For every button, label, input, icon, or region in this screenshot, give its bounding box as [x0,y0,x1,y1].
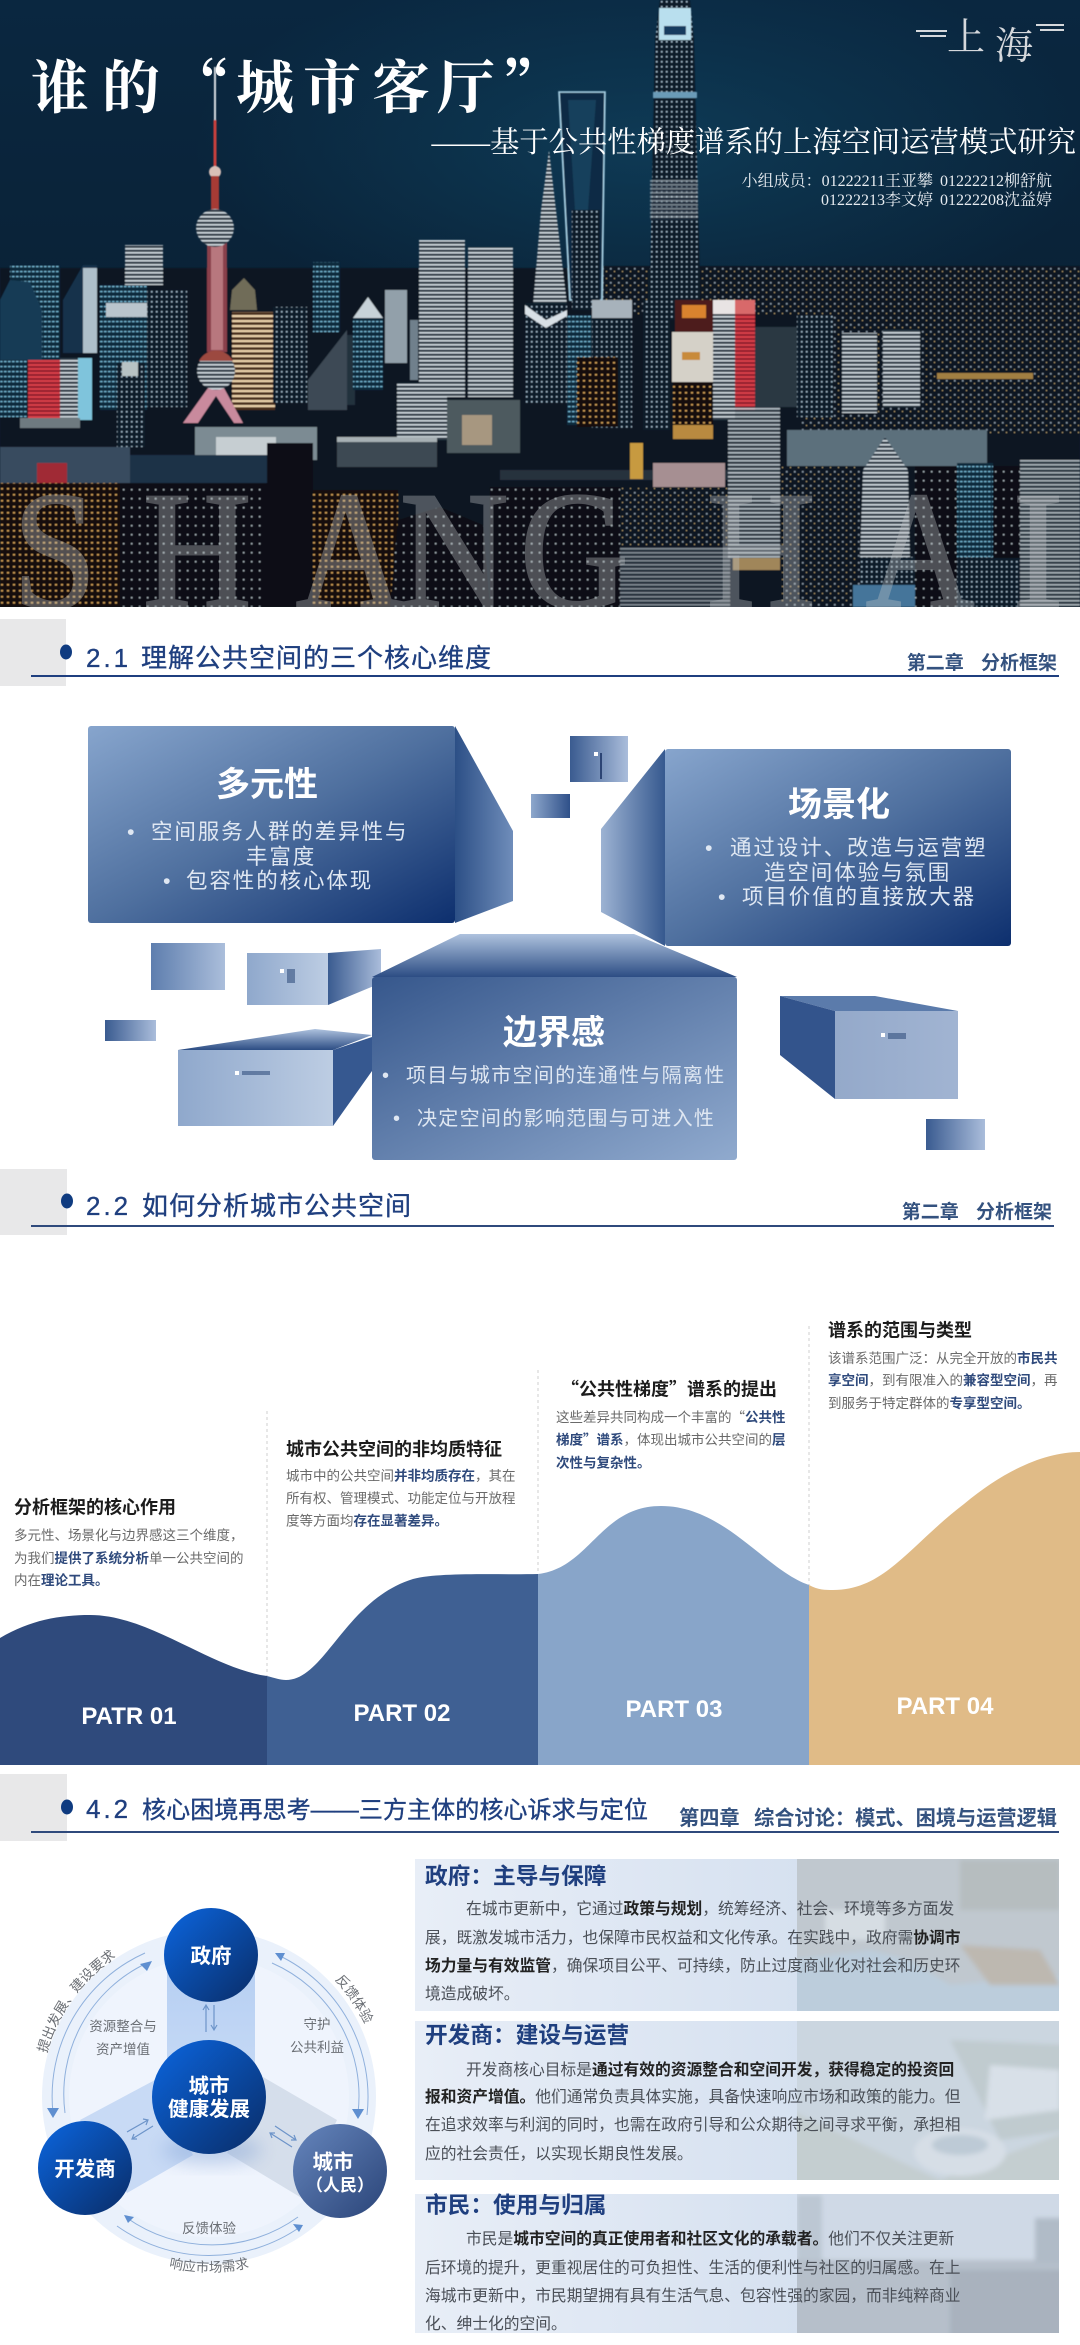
labels: 响应市场需求 [170,2257,249,2273]
node: 城市健康发展: 城市 [188,2074,230,2098]
panel: 市民: 市民是城市空间的真正使用者和社区文化的承载者。他们不仅关注更新 [466,2229,954,2248]
header 4.2 [0,1774,1059,1841]
Shanghai skyline illustration [0,0,1080,607]
panel: 市民: 海城市更新中，市民期望拥有具有生活气息、包容性强的家园，而非纯粹商业 [425,2287,960,2305]
header 4.2: 核心困境再思考——三方主体的核心诉求与定位 [142,1797,648,1824]
card: 多元性: • [127,820,136,844]
card: 场景化 [601,749,1011,946]
text: part 01 [14,1496,244,1588]
labels: 公共利益 [290,2040,344,2055]
labels: 反馈体验 [335,1974,374,2024]
text: part 01: 为我们提供了系统分析单一公共空间的 [14,1550,244,1566]
small double arrows [127,2005,296,2147]
card: 场景化: 项目价值的直接放大器 [742,885,976,909]
card: 边界感: • [393,1108,401,1130]
panel: 政府: 政府：主导与保障 [425,1863,606,1889]
card: 多元性 [88,726,513,923]
text: part 03 [556,1376,786,1470]
panel: 开发商 [415,2021,1059,2180]
panel: 政府: 场力量与有效监管，确保项目公平、可持续，防止过度商业化对社会和历史环 [425,1956,960,1975]
card: 场景化: • [705,836,714,860]
card: 场景化: 通过设计、改造与运营塑 [730,836,987,860]
panel: section 2.2 analysis waves [0,1169,1080,1765]
text: part 02: 度等方面均存在显著差异。 [286,1512,448,1528]
node: 城市（人民）: （人民） [306,2171,374,2196]
text: part 01: 多元性、场景化与边界感这三个维度， [14,1527,244,1543]
wave: part 04 [809,1452,1080,1765]
logo: 上海: 海 [995,26,1033,68]
wave: part 01: PATR 01 [81,1703,177,1730]
arrow heads [47,1953,364,2232]
panel: 开发商: 开发商核心目标是通过有效的资源整合和空间开发，获得稳定的投资回 [466,2060,954,2079]
header 4.2: 第四章 综合讨论：模式、困境与运营逻辑 [679,1806,1057,1830]
card: 边界感: 边界感 [503,1014,605,1052]
night sky background [0,0,1080,607]
header 4.2: 4.2 [86,1794,131,1824]
text: part 02: 城市公共空间的非均质特征 [286,1438,502,1460]
text: part 02 [286,1438,516,1528]
labels [36,1950,374,2273]
card: 多元性: • [163,869,172,893]
card: 边界感 [372,934,737,1160]
panel: 市民: 后环境的提升，更重视居住的可负担性、生活的便利性与社区的归属感。在上 [425,2258,960,2277]
text: part 01: 分析框架的核心作用 [14,1496,176,1518]
node: 开发商: 开发商 [54,2158,116,2181]
text: part 01: 内在理论工具。 [14,1572,108,1588]
watermark: SHANGHAI: SHANGHAI [13,458,1063,644]
panel: 政府: 境造成破坏。 [425,1984,520,2003]
text: part 03: 这些差异共同构成一个丰富的“公共性 [556,1406,786,1426]
wave: part 02: PART 02 [354,1700,450,1727]
labels: 守护 [304,2017,330,2032]
header 2.1 [0,619,1059,686]
labels: 提出发展、建设要求 [36,1950,116,2053]
card: 多元性: 包容性的核心体现 [186,869,373,893]
header 2.2: 如何分析城市公共空间 [142,1191,412,1221]
wave: part 02 [267,1574,538,1765]
header 2.1: 第二章 分析框架 [907,651,1057,674]
text: part 04: 享空间，到有限准入的兼容型空间，再 [828,1372,1058,1388]
panel: 开发商: 开发商：建设与运营 [425,2022,629,2048]
center shadow [162,2136,262,2164]
card: 多元性: 丰富度 [246,845,316,869]
card: 场景化: 造空间体验与氛围 [764,861,951,885]
team members: 01222213李文婷 01222208沈益婷 [821,191,1052,209]
node: 城市健康发展: 健康发展 [168,2097,250,2121]
card: 场景化: 场景化 [788,786,890,824]
team members: 小组成员：01222211王亚攀 01222212柳舒航 [742,172,1052,190]
subtitle: ——基于公共性梯度谱系的上海空间运营模式研究 [430,126,1076,159]
labels: 资源整合与 [89,2019,157,2034]
text: part 03: “公共性梯度”谱系的提出 [561,1376,777,1402]
logo: 上海: 上 [947,17,985,59]
card: 边界感: 决定空间的影响范围与可进入性 [417,1107,715,1130]
text: part 02: 城市中的公共空间并非均质存在，其在 [286,1468,516,1484]
diagram: city healthy development [36,1908,387,2273]
column dividers [267,1326,809,1676]
logo: 上海 [916,18,1064,62]
panel: 开发商: 在追求效率与利润的同时，也需在政府引导和公众期待之间寻求平衡，承担相 [425,2116,960,2134]
panel: 市民: 市民：使用与归属 [425,2192,606,2218]
curved arrows [52,1953,368,2255]
wave: part 03: PART 03 [626,1696,722,1723]
card: 多元性: 空间服务人群的差异性与 [151,820,408,844]
node: 政府: 政府 [190,1944,232,1968]
title: 谁的“城市客厅” [31,41,560,125]
text: part 04: 该谱系范围广泛：从完全开放的市民共 [828,1350,1058,1366]
panel: section 4.2 three stakeholders [0,1774,1059,2333]
text: part 04 [828,1320,1058,1411]
photo overlay: waterfront district [797,2021,1059,2180]
wave: part 03 [538,1506,809,1765]
panel: 开发商: 应的社会责任，以实现长期良性发展。 [425,2144,693,2163]
labels: 反馈体验 [182,2221,236,2236]
header 2.1: 2.1 [86,643,131,673]
team members [742,172,1052,209]
card: 边界感: 项目与城市空间的连通性与隔离性 [406,1064,726,1087]
small cubes decoration [105,736,985,1150]
text: part 04: 谱系的范围与类型 [828,1320,972,1340]
photo overlay: city skyline [797,2194,1059,2333]
photo overlay: city aerial [797,1859,1059,2011]
panel: 市民: 化、绅士化的空间。 [425,2315,567,2333]
card: 场景化: • [718,885,727,909]
node: 政府 [164,1908,258,2002]
header 2.2: 2.2 [86,1191,131,1221]
panel: section 2.1 three dimensions [0,619,1059,1160]
node: 城市健康发展 [152,2040,266,2154]
header 2.2: 第二章 分析框架 [902,1200,1052,1223]
panel: 政府: 展，既激发城市活力，也保障市民权益和文化传承。在实践中，政府需协调市 [425,1928,961,1947]
panel: hero city photo banner [0,0,1080,644]
wave: part 01 [0,1615,267,1765]
text: part 04: 到服务于特定群体的专享型空间。 [828,1395,1030,1411]
panel: 开发商: 报和资产增值。他们通常负责具体实施，具备快速响应市场和政策的能力。但 [425,2087,961,2106]
wave: part 04: PART 04 [897,1693,994,1720]
text: part 03: 梯度”谱系，体现出城市公共空间的层 [556,1428,786,1448]
header 2.2 [0,1169,1054,1235]
panel: 政府 [415,1859,1059,2011]
labels: 资产增值 [96,2042,150,2057]
card: 边界感: • [382,1065,390,1087]
header 2.1: 理解公共空间的三个核心维度 [141,643,492,673]
card: 多元性: 多元性 [216,766,318,804]
node: 开发商 [38,2121,132,2215]
node: 城市（人民）: 城市 [312,2150,354,2174]
panel: 市民 [415,2193,1059,2333]
panel: 政府: 在城市更新中，它通过政策与规划，统筹经济、社会、环境等多方面发 [466,1899,954,1918]
text: part 03: 次性与复杂性。 [556,1454,650,1470]
node: 城市（人民） [293,2124,387,2218]
diagram background circle [42,1930,376,2264]
text: part 02: 所有权、管理模式、功能定位与开放程 [286,1490,516,1506]
